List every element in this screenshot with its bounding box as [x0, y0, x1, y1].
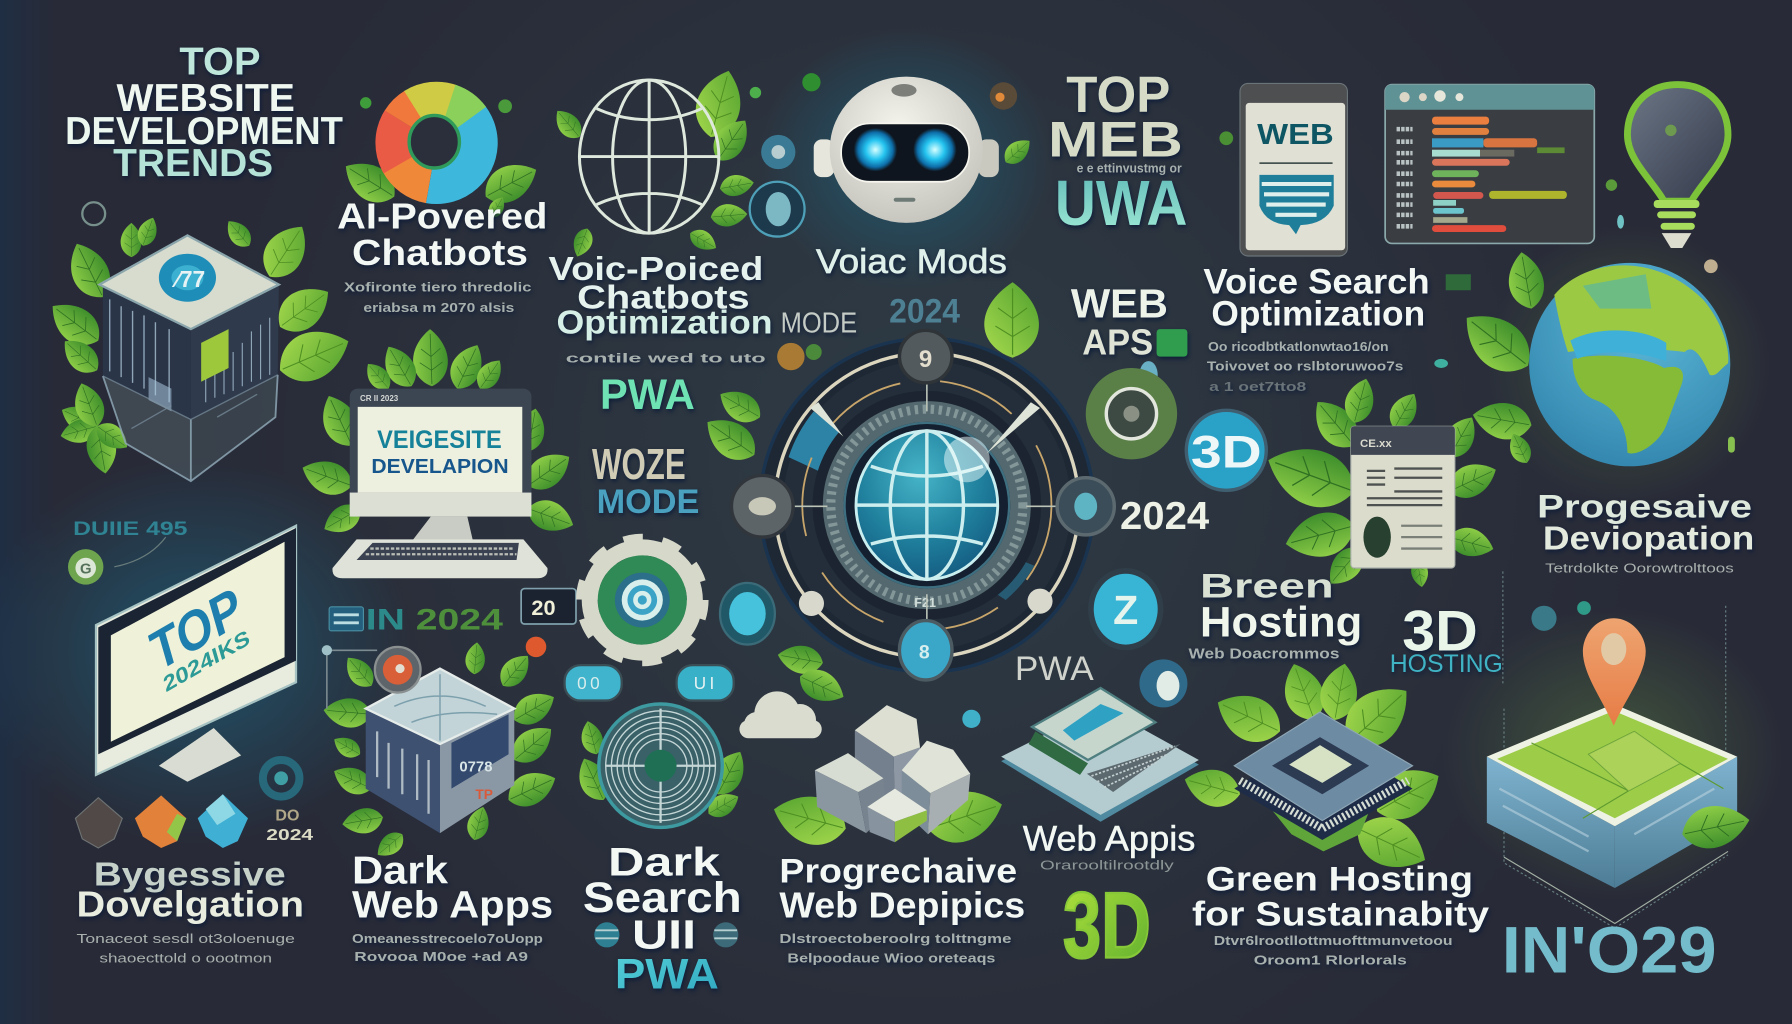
title: top website development trends: [65, 40, 343, 185]
label: dark web apps: Omeanesstrecoelo7oUopp: [352, 932, 543, 946]
label: dark web apps: [352, 849, 553, 964]
icon: data cube with leaves and badge: [322, 637, 562, 863]
title: top website development trends: TOP: [179, 40, 261, 83]
label: AI-powered chatbots: AI-Povered: [337, 196, 547, 237]
icons: striped balls beside UII: [594, 922, 738, 947]
icon: gear with spiral: [587, 545, 697, 655]
label: voice mods: Voiac Mods: [816, 243, 1007, 281]
label: 3D hosting: [1390, 599, 1503, 678]
small decorative icons by robot: [750, 73, 1036, 237]
central dial with globe: 9: [919, 346, 932, 373]
small decorative icons left: [68, 518, 188, 585]
label: woze mode: WOZE: [592, 441, 686, 489]
icon: wireframe globe with leaves: [549, 65, 757, 260]
icons: right of dial nodes: 3D: [1191, 426, 1262, 477]
label: breen hosting: Hosting: [1200, 599, 1362, 646]
icon: phone with web card: WEB: [1257, 119, 1334, 151]
title block: top meb uwa: e e ettinvustmg or: [1077, 162, 1182, 176]
label: AI-powered chatbots: [337, 196, 547, 315]
icon: earth globe with leaves: [1434, 249, 1735, 467]
icons: three gems and ring: [75, 760, 313, 848]
label: in'029: IN'O29: [1502, 914, 1717, 988]
label: dark web apps: Dark: [352, 849, 448, 892]
icon: browser window with bar chart: [1385, 85, 1594, 243]
decorative leaves by dial: [697, 282, 1158, 710]
badge: 20: 20: [531, 595, 556, 620]
icon: document card with leaves: [1259, 375, 1502, 593]
icon: desktop monitor with veigesite develapion: DEVELAPION: [371, 455, 509, 478]
icons: right of dial nodes: [1086, 368, 1266, 650]
label: 3D hosting: HOSTING: [1390, 650, 1503, 678]
label: voice-poiced chatbots optimization mode: MODE: [781, 308, 857, 340]
label: progressive development left: Dovelgation: [77, 884, 304, 925]
icon: cloud: [739, 691, 822, 738]
icon: document card with leaves: CE.xx: [1360, 438, 1392, 450]
icons: right of dial nodes: 2024: [1120, 495, 1210, 538]
icons: pills and blue node: U I: [694, 673, 714, 693]
title block: top meb uwa: TOP: [1066, 65, 1170, 123]
label: web apps: [1071, 281, 1187, 362]
label: progressive web depipics: Progrechaive: [779, 852, 1017, 890]
title block: top meb uwa: UWA: [1055, 167, 1187, 239]
icon: isometric green box with location pin: [1487, 571, 1754, 928]
label: voice-poiced chatbots optimization mode: [549, 251, 857, 365]
icon: data cube with leaves and badge: TP: [475, 787, 493, 802]
label: web apps: WEB: [1071, 281, 1168, 327]
icon: tablet on platform: [962, 659, 1199, 822]
label: PWA grey: PWA: [1015, 650, 1094, 688]
label: AI-powered chatbots: eriabsa m 2070 alsis: [363, 301, 514, 315]
central dial with globe: F21: [914, 596, 936, 610]
icons: right of dial nodes: Z: [1113, 587, 1138, 633]
label: PWA green: PWA: [600, 371, 695, 418]
icon: light bulb: [1606, 85, 1728, 248]
label: voice search optimization: Oo ricodbtkatlonwtao16/on: [1208, 340, 1389, 354]
icon: stacked cubes with leaves: [768, 705, 1009, 852]
label: progressive web depipics: Belpoodaue Wioo oreteaqs: [787, 951, 995, 965]
icon: big angled monitor: 2024IKS: [161, 626, 252, 697]
icons: three gems and ring: 2024: [266, 827, 313, 844]
central dial with globe: [731, 330, 1114, 680]
label: dark web apps: Web Apps: [352, 884, 553, 926]
label: green hosting for sustainability: [1192, 860, 1489, 968]
label: web appis: Web Appis: [1023, 818, 1195, 858]
icon: isometric server cube with leaves: ⁄77: [171, 266, 205, 292]
icon: big angled monitor: TOP: [145, 576, 248, 684]
label: dark search uii pwa: Dark: [608, 840, 721, 884]
icon: data cube with leaves and badge: 0778: [459, 759, 492, 775]
label: progressive development: [1537, 489, 1754, 576]
label: progressive development: Progesaive: [1537, 489, 1752, 525]
label: 2024 top: 2024: [889, 292, 960, 330]
label: breen hosting: [1189, 568, 1362, 662]
label: AI-powered chatbots: Xofironte tiero thredolic: [344, 280, 531, 294]
icon: robot head: [814, 77, 999, 223]
label: breen hosting: Web Doacrommos: [1189, 646, 1339, 662]
small decorative icons left: G: [80, 562, 92, 578]
label: progressive development: Tetrdolkte Oorowtrolttoos: [1545, 562, 1734, 576]
label: web appis: Orarooltilrootdly: [1040, 859, 1175, 873]
label: progressive development left: Bygessive: [94, 857, 286, 894]
label: breen hosting: Breen: [1200, 568, 1334, 606]
icon: chip with leaves: [1180, 658, 1449, 881]
label: green hosting for sustainability: Oroom1 Rlorlorals: [1254, 954, 1407, 968]
label: woze mode: [592, 441, 699, 521]
central dial with globe: 8: [919, 641, 930, 663]
label: woze mode: MODE: [597, 483, 699, 521]
label: dark search uii pwa: UII: [632, 912, 696, 958]
label: progressive development: Deviopation: [1543, 521, 1754, 558]
title block: top meb uwa: [1048, 65, 1187, 239]
title block: top meb uwa: MEB: [1048, 111, 1183, 168]
label: AI-powered chatbots: Chatbots: [352, 232, 528, 273]
icon: desktop monitor with veigesite develapion: CR II 2023: [360, 394, 399, 403]
label: progressive development left: shaoecttold o oootmon: [99, 951, 272, 965]
label: voice search optimization: [1203, 262, 1430, 394]
label: dark search uii pwa: PWA: [615, 951, 719, 998]
icon: phone with web card: [1219, 83, 1347, 256]
icon: big angled monitor: [96, 526, 296, 782]
label: progressive web depipics: Web Depipics: [779, 885, 1025, 926]
label: voice-poiced chatbots optimization mode: contile wed to uto: [566, 351, 766, 365]
label: voice-poiced chatbots optimization mode: Optimization: [557, 305, 773, 342]
icon: colourful donut with leaves: [336, 83, 544, 220]
icon: radar circle with leaves: [571, 704, 753, 827]
label: voice-poiced chatbots optimization mode: Chatbots: [577, 280, 750, 317]
label: green hosting for sustainability: Green Hosting: [1206, 860, 1473, 898]
badge: 20: [521, 589, 576, 624]
label: progressive web depipics: Dlstroectoberoolrg tolttngme: [779, 932, 1011, 946]
label: voice-poiced chatbots optimization mode: Voic-Poiced: [549, 251, 763, 288]
label: voice search optimization: a 1 oet7tto8: [1209, 380, 1306, 394]
label: web apps: APS: [1082, 321, 1153, 362]
small decorative icons left: DUIIE 495: [73, 518, 188, 540]
label: progressive development left: Tonaceot sesdl ot3oloenuge: [77, 932, 295, 946]
title: top website development trends: WEBSITE: [117, 77, 295, 120]
label: dark web apps: Rovooa M0oe +ad A9: [354, 950, 528, 964]
label: dark search uii pwa: [583, 840, 742, 998]
title: top website development trends: TRENDS: [113, 142, 273, 185]
label: progressive web depipics: [779, 852, 1025, 965]
label: dark search uii pwa: Search: [583, 874, 742, 921]
icon: desktop monitor with veigesite develapion: VEIGESITE: [377, 426, 502, 454]
icon: desktop monitor with veigesite develapion: [297, 329, 578, 578]
icons: pills and blue node: 0 0: [577, 673, 600, 693]
label: green hosting for sustainability: for Sustainabity: [1192, 896, 1489, 934]
label: in 2024: IN 2024: [366, 604, 503, 637]
label: green hosting for sustainability: Dtvr6lrootllottmuofttmunvetoou: [1214, 934, 1453, 948]
label: voice search optimization: Optimization: [1211, 294, 1425, 334]
icons: pills and blue node: [565, 583, 775, 701]
label: voice search optimization: Toivovet oo rslbtoruwoo7s: [1207, 359, 1403, 373]
label: 3D hosting: 3D: [1402, 599, 1478, 663]
icon: isometric server cube with leaves: [42, 202, 357, 481]
label: 3D green: 3D: [1063, 873, 1151, 978]
label: voice search optimization: Voice Search: [1203, 262, 1430, 302]
icons: three gems and ring: DO: [275, 808, 299, 825]
label: progressive development left: [77, 857, 304, 965]
title: top website development trends: DEVELOPMENT: [65, 110, 343, 153]
label: in 2024: [329, 604, 503, 637]
